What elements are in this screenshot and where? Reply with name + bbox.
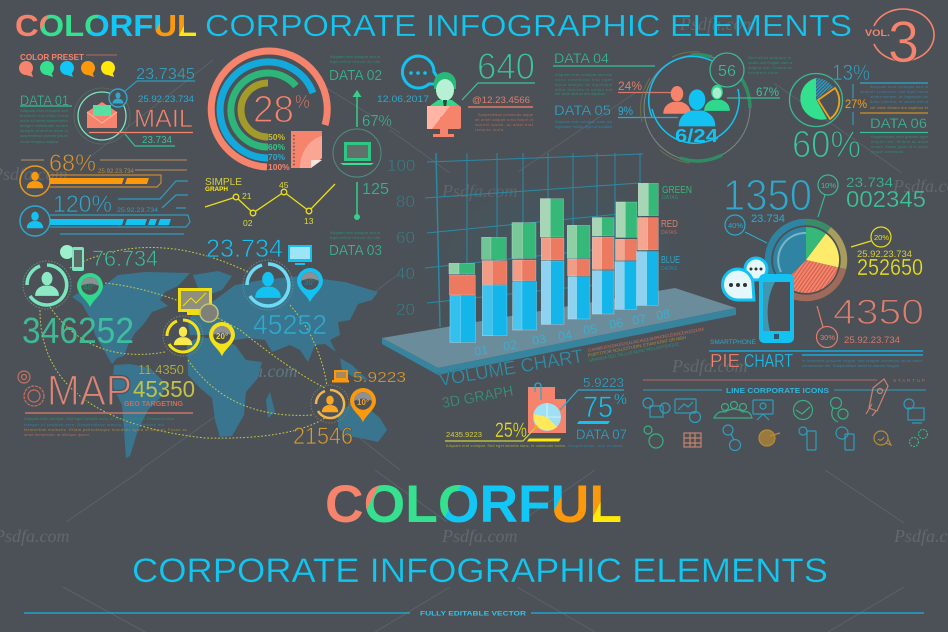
panel: data 06 pie: Suspendisse sem gravida eget [871, 134, 929, 139]
panel: pie chart: SMARTPHONE [710, 339, 757, 346]
panel: data 06 pie: 27% [845, 99, 867, 111]
map heading: integer ut sodales sem. Suspendisse mauris, feugiat finibus dui [24, 422, 164, 427]
platform numbers: 05 [582, 322, 598, 338]
series legend: RED [661, 219, 678, 230]
bar 7 [615, 202, 637, 309]
value 23.7345: 23.7345 [136, 66, 195, 83]
radial team 6/24: 67% [756, 87, 779, 99]
panel: data 02: DATA 02 [329, 68, 382, 84]
line graph: GRAPH [205, 187, 228, 193]
title words: corporate infographic elements: CORPORATE INFOGRAPHIC ELEMENTS [205, 8, 852, 43]
panel: line corporate icons [643, 378, 928, 450]
platform numbers: 06 [608, 316, 624, 332]
pie sectors [800, 78, 839, 120]
panel: data 02: eget tellus rutrum ac nisl [330, 59, 380, 64]
icon: laptop circle [333, 129, 381, 177]
callout 30 percent [816, 306, 838, 348]
icon: orange person [20, 166, 50, 196]
text block data 01: dolor sit amet consectetur [20, 118, 69, 123]
axis labels: 100 [387, 156, 415, 175]
panel: data 01 mail [20, 66, 195, 146]
radial chart 28 percent [211, 51, 327, 172]
text block data 01: Aliquam erat volutpat sed [20, 108, 68, 113]
icon: note page [291, 131, 322, 168]
heading pie chart: CHART [744, 351, 793, 371]
icon: mail circle [74, 88, 130, 144]
text block data 01: suspendisse potenti ipsum [20, 133, 69, 138]
scale labels: 70% [268, 152, 285, 162]
bars [449, 183, 658, 342]
value 4350: 4350 [833, 293, 924, 332]
watermark text: Psdfa.com [441, 526, 518, 546]
text block data 01 [20, 108, 69, 144]
chart captions [437, 327, 704, 412]
panel: data 06 pie: neque commodo [871, 149, 904, 154]
map node: green 40: 40° [83, 283, 95, 292]
panel: progress 120 percent: 120% [53, 191, 112, 218]
icon row 1 [643, 379, 924, 423]
panel: data 06 pie: dolor lobortis, in varius est ut [870, 99, 929, 104]
panel: data 04 and 05: Aliquam erat volutpat, nam dui [555, 119, 612, 124]
panel: pie chart: 25.92.23.734 [857, 249, 912, 259]
panel: data 04 and 05: Aliquam erat volutpat sed dui [555, 72, 612, 77]
label 6/24: 6/24 [675, 126, 718, 146]
value 1350: 1350 [723, 171, 812, 220]
heading data 03: DATA 03 [329, 243, 382, 259]
pie outer ring [768, 222, 844, 298]
value 640: 640 [477, 46, 535, 87]
panel: data 06 pie: DATA 06 [870, 115, 927, 131]
callout 30 percent: 30% [820, 333, 835, 342]
panel: pie chart: 23.734 [846, 174, 893, 190]
panel: progress 68 percent [20, 150, 187, 196]
value 28 percent: % [295, 92, 310, 112]
panel: data 07 file: Suspendisse, nisl ut amet. [568, 444, 624, 448]
panel: progress 68 percent: 25.92.23.734 [98, 169, 135, 175]
bar 5 [567, 225, 590, 319]
panel: data 04 and 05: dolor lobortis in varius est [555, 87, 613, 92]
series legend: DATAS [661, 230, 678, 236]
platform numbers: 04 [557, 328, 573, 344]
icon: chat bubbles [722, 258, 767, 300]
watermark text: Psdfa.com [671, 356, 748, 376]
panel: data 02: 67% [362, 113, 392, 130]
text block data 01: morbi tempus magna [20, 139, 59, 144]
map node: blue 30 [206, 235, 327, 340]
panel: pie chart [709, 171, 926, 371]
watermark text: Psdfa.com [441, 181, 518, 201]
icon: document with pie [528, 383, 566, 433]
map node: green 40: 346252 [22, 310, 134, 351]
map node: yellow 20: 45350 [133, 376, 195, 402]
panel: data 02: Aliquam erat volutpat sed in [330, 54, 380, 59]
bottom title colorful: COLORFUL [325, 475, 622, 534]
bar 4 [540, 199, 564, 324]
radial team 6/24: mollis orci feugiat nam a [748, 60, 793, 65]
map heading: GEO TARGETING [124, 401, 184, 408]
map node: blue 30: 30° [304, 278, 316, 287]
heading pie chart [710, 351, 793, 371]
bar 2 [482, 237, 507, 336]
callout 20 percent [851, 227, 891, 247]
panel: data 04 and 05 [553, 50, 678, 129]
panel: pie chart: 23.734 [751, 213, 785, 225]
platform numbers [473, 307, 671, 359]
axis labels: 20 [396, 300, 415, 319]
panel: user at desk 640: @12.23.4566 [472, 95, 530, 105]
panel: user at desk 640: laoreet ipsum, ac amet erat [475, 122, 534, 127]
panel: user at desk 640: Suspendisse commodo tuque [478, 112, 534, 117]
panel: data 07 file: 5.9223 [583, 375, 624, 390]
line graph [205, 177, 335, 228]
panel: data 04 and 05: 9% [618, 106, 633, 118]
text block data 01: integer sollicitudin ornare [20, 123, 69, 128]
dotted connection arcs [40, 247, 327, 438]
scale labels: 50% [268, 132, 285, 142]
chart captions: GRAVIDA SED TELLUS NUNC PELLENTESQUE [588, 341, 680, 363]
panel: data 06 pie: aliquet nisl, finibus ac amet [871, 139, 929, 144]
icon: phone and chart [60, 245, 84, 271]
panel: data 01 mail: 23.734 [142, 134, 172, 146]
badge 56: 56 [718, 63, 736, 80]
scale labels [268, 132, 290, 172]
axis labels: 80 [396, 192, 415, 211]
panel: pie chart: 25.92.23.734 [844, 335, 900, 345]
panel: data 07 file: Aliquam erat volutpat. Sed eget lobortis nunc, in commodo lorem. [446, 444, 566, 448]
panel: pie chart: 002345 [846, 186, 926, 212]
panel: data 04 and 05: DATA 04 [554, 50, 609, 66]
platform numbers: 07 [631, 312, 647, 328]
panel: data 04 and 05: lacus semper ac dignissim [555, 82, 613, 87]
map node: orange 10 [293, 369, 406, 450]
heading data 03: eget tellus rutrum ac nisl [330, 235, 380, 240]
icon: smartphone [759, 274, 794, 343]
panel: data 06 pie: Aliquam erat volutpat sed in [870, 84, 928, 89]
map node: orange 10: 10° [357, 398, 369, 407]
heading data 01: DATA 01 [20, 92, 69, 108]
axis labels: 60 [396, 228, 415, 247]
icon row 2 [644, 425, 928, 450]
chart captions: PORTTITOR SOLLICITUDIN, ETIAM ERAT OR NIBH [587, 335, 687, 358]
map node: green 40 [22, 245, 158, 351]
line graph: 13 [304, 216, 314, 226]
panel: data 07 file: 2435.9223 [446, 430, 482, 439]
panel: data 06 pie: semper commodo nisi eget lacus [860, 89, 928, 94]
icon: gears [18, 371, 44, 406]
panel: user at desk 640: 12.06.2017 [377, 94, 429, 105]
callout 10 percent: 10% [821, 181, 836, 190]
platform [382, 288, 736, 375]
platform numbers: 03 [531, 332, 547, 348]
line graph: SIMPLE [205, 177, 242, 188]
panel: progress 120 percent [20, 181, 190, 236]
series legend [661, 185, 692, 272]
badge 56 [710, 53, 744, 87]
platform numbers: 01 [473, 343, 489, 359]
line graph: 02 [243, 218, 253, 228]
radial team 6/24: magna nisl. Cursus ac [748, 65, 792, 70]
callout 40 percent [725, 215, 767, 243]
panel: pie chart: In hendrerit posuere neque, sed feugiat commodo lacus amet [802, 358, 923, 363]
series legend: GREEN [662, 185, 692, 196]
map node: orange 10: 5.9223 [353, 369, 406, 386]
series legend: BLUE [661, 255, 680, 266]
footer rule: FULLY EDITABLE VECTOR [420, 610, 526, 618]
callout 10 percent [818, 175, 838, 217]
panel: data 07 file: 25% [495, 419, 527, 442]
panel: data 07 file [445, 375, 627, 448]
icon: person at monitor [427, 72, 461, 137]
panel: data 01 mail: 25.92.23.734 [138, 94, 194, 105]
watermark text: Psdfa.com [221, 361, 298, 381]
panel: data 06 pie: 13% [832, 60, 870, 85]
value 28 percent: 28 [253, 89, 294, 131]
panel: data 06 pie: vel vitae dictum dui dapibus et [870, 105, 929, 110]
panel: data 04 and 05: 24% [618, 81, 642, 93]
progress bar blue [50, 215, 190, 227]
title word: colorful: COLORFUL [15, 8, 197, 43]
heading data 03 [329, 230, 382, 259]
map heading: fermentum molestie. Etiam pellentesque tincidunt ligula ut aliquet. Fusce ac [24, 427, 187, 432]
panel: user at desk 640 [377, 46, 535, 137]
radial team 6/24: hendrerit risus [748, 70, 778, 75]
panel: data 04 and 05: nunc commodo nisi eget [555, 77, 613, 82]
icon: laptop [332, 370, 349, 382]
chart captions: CURABITUR SODALES, NULLA EU ALIQUAM RHONCUS, IN SODALES DUI MI [587, 327, 704, 353]
panel: data 02 [329, 54, 392, 259]
panel: line corporate icons: STARTUP [893, 378, 925, 384]
icon: speech bubble [402, 56, 442, 88]
chart captions: 3D GRAPH [441, 383, 515, 412]
word mail: MAIL [134, 105, 193, 133]
color preset: COLOR PRESET [20, 53, 84, 62]
bar 3 [512, 223, 537, 330]
watermark text: Psdfa.com [679, 14, 756, 34]
scale labels: 100% [268, 162, 290, 172]
bottom subtitle: CORPORATE INFOGRAPHIC ELEMENTS [132, 552, 828, 590]
volume badge [865, 9, 934, 75]
icon: blue person [20, 206, 50, 236]
panel: data 02: 125 [362, 181, 389, 198]
title [15, 8, 852, 43]
panel: data 07 file: % [614, 391, 627, 408]
panel: data 04 and 05: vel vitae dictum dui dapibus [555, 91, 605, 96]
panel: user at desk 640: tempus nulla [475, 127, 504, 132]
panel: data 06 pie [790, 60, 929, 166]
series legend: DATAS [661, 266, 678, 272]
axis labels: 40 [396, 264, 415, 283]
heading pie chart: PIE [710, 351, 740, 371]
panel: user at desk 640: sit amet aliquet urna fusce ut [475, 117, 534, 122]
axis labels [387, 156, 415, 319]
panel: data 06 pie: luctus. Etiam justo id in dolor [871, 144, 929, 149]
color preset [19, 53, 117, 77]
panel: pie chart: 252650 [857, 254, 923, 280]
panel: data 06 pie: 60% [792, 124, 861, 166]
icon: user badge [109, 89, 127, 107]
chart grid [425, 153, 643, 327]
map node: orange 10: 21546 [293, 423, 353, 450]
chart captions: VOLUME CHART [437, 346, 585, 391]
line graph: 21 [242, 191, 252, 201]
bar 6 [592, 218, 614, 314]
panel: pie chart: consectetur elit. Suspendisse amet id mauris feugiat [802, 363, 900, 368]
callout 20 percent: 20% [874, 233, 889, 242]
text block data 01: semper pharetra diam in [20, 128, 68, 133]
pie sectors [773, 227, 839, 293]
progress bar orange [50, 175, 161, 187]
bar 8 [637, 183, 658, 305]
bar 1 [449, 263, 476, 342]
map node: blue 30: 23.734 [206, 235, 283, 263]
icon: three people [663, 85, 730, 126]
panel: data 07 file: 75 [583, 391, 613, 424]
platform numbers: 02 [502, 338, 518, 354]
map node: yellow 20: 11.4350 [138, 362, 184, 377]
map node: green 40: 76.734 [92, 246, 158, 271]
map node: yellow 20 [133, 288, 235, 402]
panel: progress 68 percent: 68% [49, 150, 96, 177]
series legend: DATAS [662, 195, 679, 201]
panel: line corporate icons: LINE CORPORATE ICONS [726, 388, 829, 395]
panel: data 06 pie: ornare semper, ac dignissim dui [870, 94, 928, 99]
3d volume chart [380, 140, 740, 412]
map heading: MAP [47, 367, 132, 415]
panel: data 07 file: DATA 07 [576, 426, 627, 442]
platform numbers: 08 [655, 307, 671, 323]
arrow up [352, 90, 362, 127]
map heading: Aliquam erat volutpat. Sed eget lobortis nunc, in commodo lorem. Praesent risus [24, 416, 174, 421]
icon: monitor chart [178, 288, 212, 315]
panel: data 04 and 05: DATA 05 [554, 102, 611, 118]
heading data 03: Aliquam erat volutpat sed in [330, 230, 380, 235]
map node: yellow 20: 20° [216, 332, 228, 341]
panel: progress 120 percent: 25.92.23.734 [117, 207, 158, 214]
volume badge: VOL. [865, 28, 890, 39]
scale labels: 60% [268, 142, 285, 152]
callout 40 percent: 40% [728, 221, 743, 230]
icon: monitor [288, 245, 312, 265]
map heading: amet fermentum, at tristique ipsum. [24, 432, 90, 437]
panel: data 04 and 05: dignissim mollis, eget ut sodales [555, 124, 612, 129]
map node: blue 30: 45252 [253, 309, 327, 340]
radial team 6/24: Sed tellus aliquam in [748, 55, 791, 60]
world map [72, 271, 387, 458]
line graph: 45 [279, 180, 289, 190]
radial team 6/24 [641, 52, 793, 163]
text block data 01: tincidunt nisi vitae lorem [20, 113, 69, 118]
volume badge: 3 [888, 10, 919, 75]
map heading [18, 367, 193, 437]
